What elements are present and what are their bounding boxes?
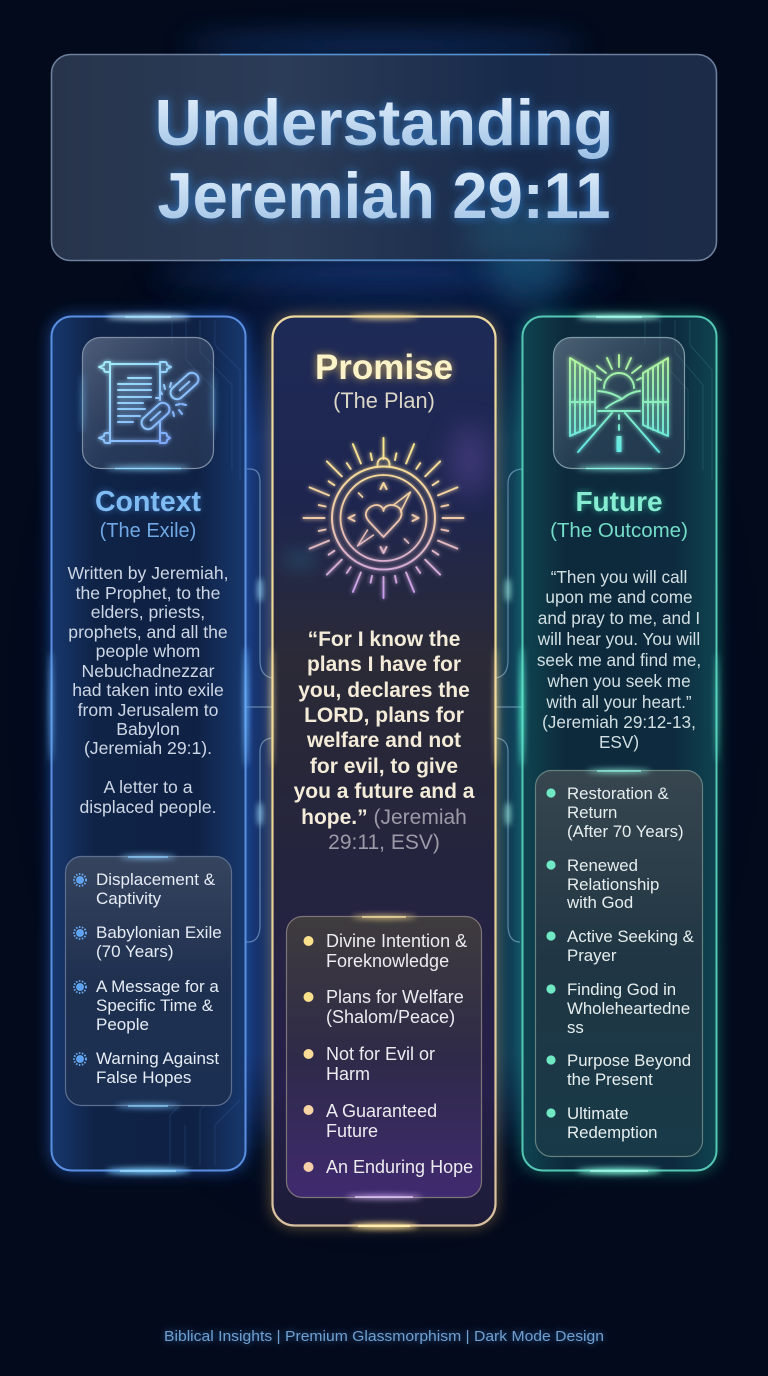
list text: Foreknowledge — [326, 951, 449, 971]
list text: ss — [567, 1018, 584, 1037]
list text: Displacement & — [96, 870, 216, 889]
text block: context description: the Prophet, to the — [76, 583, 220, 603]
text block: promise quote: plans I have for — [307, 653, 461, 676]
text block: future scripture: will hear you. You will — [537, 629, 700, 649]
text block: future scripture: “Then you will call — [551, 567, 687, 587]
subheading: promise: (The Plan) — [333, 388, 435, 413]
list: context points — [66, 855, 232, 1108]
text block: promise quote: 29:11, ESV) — [328, 831, 440, 854]
text block: promise quote: “For I know the — [308, 628, 460, 651]
text block: promise quote: welfare and not — [306, 729, 461, 752]
text block: promise quote: for evil, to give — [310, 755, 458, 778]
text block: context description — [67, 563, 229, 817]
list text: (After 70 Years) — [567, 822, 684, 841]
list text: A Guaranteed — [326, 1101, 437, 1121]
text block: context description: from Jerusalem to — [78, 700, 219, 720]
text block: context description: had taken into exile — [72, 680, 224, 700]
list: future points — [536, 769, 702, 1156]
footer: Biblical Insights | Premium Glassmorphism | Dark Mode Design — [164, 1328, 604, 1345]
text block: promise quote: hope.” (Jeremiah — [301, 806, 467, 829]
title: Jeremiah 29:11 — [158, 159, 610, 232]
list text: Warning Against — [96, 1049, 219, 1068]
subheading: future: (The Outcome) — [550, 519, 688, 542]
text block: future scripture: seek me and find me, — [537, 650, 701, 670]
list text: Plans for Welfare — [326, 987, 464, 1007]
text block: future scripture: upon me and come — [545, 587, 693, 607]
text block: promise quote: you, declares the — [298, 679, 470, 702]
text block: future scripture — [537, 567, 701, 752]
text block: future scripture: and pray to me, and I — [538, 608, 700, 628]
heading: context: Context — [95, 486, 202, 518]
list text: Ultimate — [567, 1104, 629, 1123]
list text: Not for Evil or — [326, 1044, 435, 1064]
icon: open gates, sunrise and road — [554, 338, 684, 470]
list text: Future — [326, 1121, 378, 1141]
list text: Renewed — [567, 856, 638, 875]
bullets — [304, 936, 314, 1172]
text block: context description: Written by Jeremiah, — [67, 563, 229, 583]
text block: future scripture: with all your heart.” — [545, 692, 692, 712]
list text: with God — [566, 893, 633, 912]
text block: context description: A letter to a — [104, 777, 193, 797]
heading: future: Future — [575, 486, 663, 517]
bullets — [546, 788, 556, 1118]
list text: An Enduring Hope — [326, 1157, 473, 1177]
title panel — [52, 54, 716, 265]
list text: A Message for a — [96, 977, 219, 996]
list text: (Shalom/Peace) — [326, 1007, 455, 1027]
icon: bullet — [74, 874, 86, 1065]
text block: future scripture: when you seek me — [546, 671, 691, 691]
text block: promise quote — [294, 628, 475, 854]
list text — [96, 870, 222, 1087]
text block: promise quote: you a future and a — [294, 780, 475, 803]
list: promise points — [286, 915, 482, 1199]
list text: Active Seeking & — [567, 927, 694, 946]
list text: Wholeheartedne — [567, 999, 690, 1018]
text block: context description: Nebuchadnezzar — [81, 661, 215, 681]
list text: Prayer — [567, 946, 617, 965]
text block: future scripture: (Jeremiah 29:12-13, — [542, 712, 696, 732]
text block: promise quote: LORD, plans for — [304, 704, 464, 727]
list text: (70 Years) — [96, 942, 174, 961]
text block: context description: displaced people. — [80, 797, 216, 817]
panel: future — [520, 314, 718, 1174]
list text: Captivity — [96, 889, 162, 908]
list text: Purpose Beyond — [567, 1051, 691, 1070]
list text: Harm — [326, 1064, 370, 1084]
list text: Babylonian Exile — [96, 923, 222, 942]
icon: compass with heart and rays — [304, 438, 464, 598]
heading: promise: Promise — [315, 348, 453, 387]
title: Understanding — [155, 86, 613, 159]
text block: context description: (Jeremiah 29:1). — [84, 738, 212, 758]
list text — [566, 784, 694, 1142]
text block: context description: people whom — [96, 641, 200, 661]
list text — [326, 931, 473, 1177]
text block: future scripture: ESV) — [599, 732, 639, 752]
title — [155, 86, 613, 232]
panel: context — [50, 314, 248, 1174]
connectors between panels — [246, 469, 522, 942]
text block: context description: prophets, and all the — [68, 622, 228, 642]
list text: People — [96, 1015, 149, 1034]
list text: Restoration & — [567, 784, 669, 803]
list text: Return — [567, 803, 617, 822]
list text: Finding God in — [567, 980, 676, 999]
list text: Specific Time & — [96, 996, 214, 1015]
list text: Redemption — [567, 1123, 658, 1142]
icon: scroll and broken chain — [81, 338, 215, 470]
text block: context description: elders, priests, — [91, 602, 205, 622]
list text: the Present — [567, 1070, 653, 1089]
list text: False Hopes — [96, 1068, 191, 1087]
list text: Divine Intention & — [326, 931, 467, 951]
subheading: context: (The Exile) — [100, 520, 196, 542]
panel: promise — [270, 315, 498, 1229]
text block: context description: Babylon — [116, 719, 180, 739]
list text: Relationship — [567, 875, 659, 894]
